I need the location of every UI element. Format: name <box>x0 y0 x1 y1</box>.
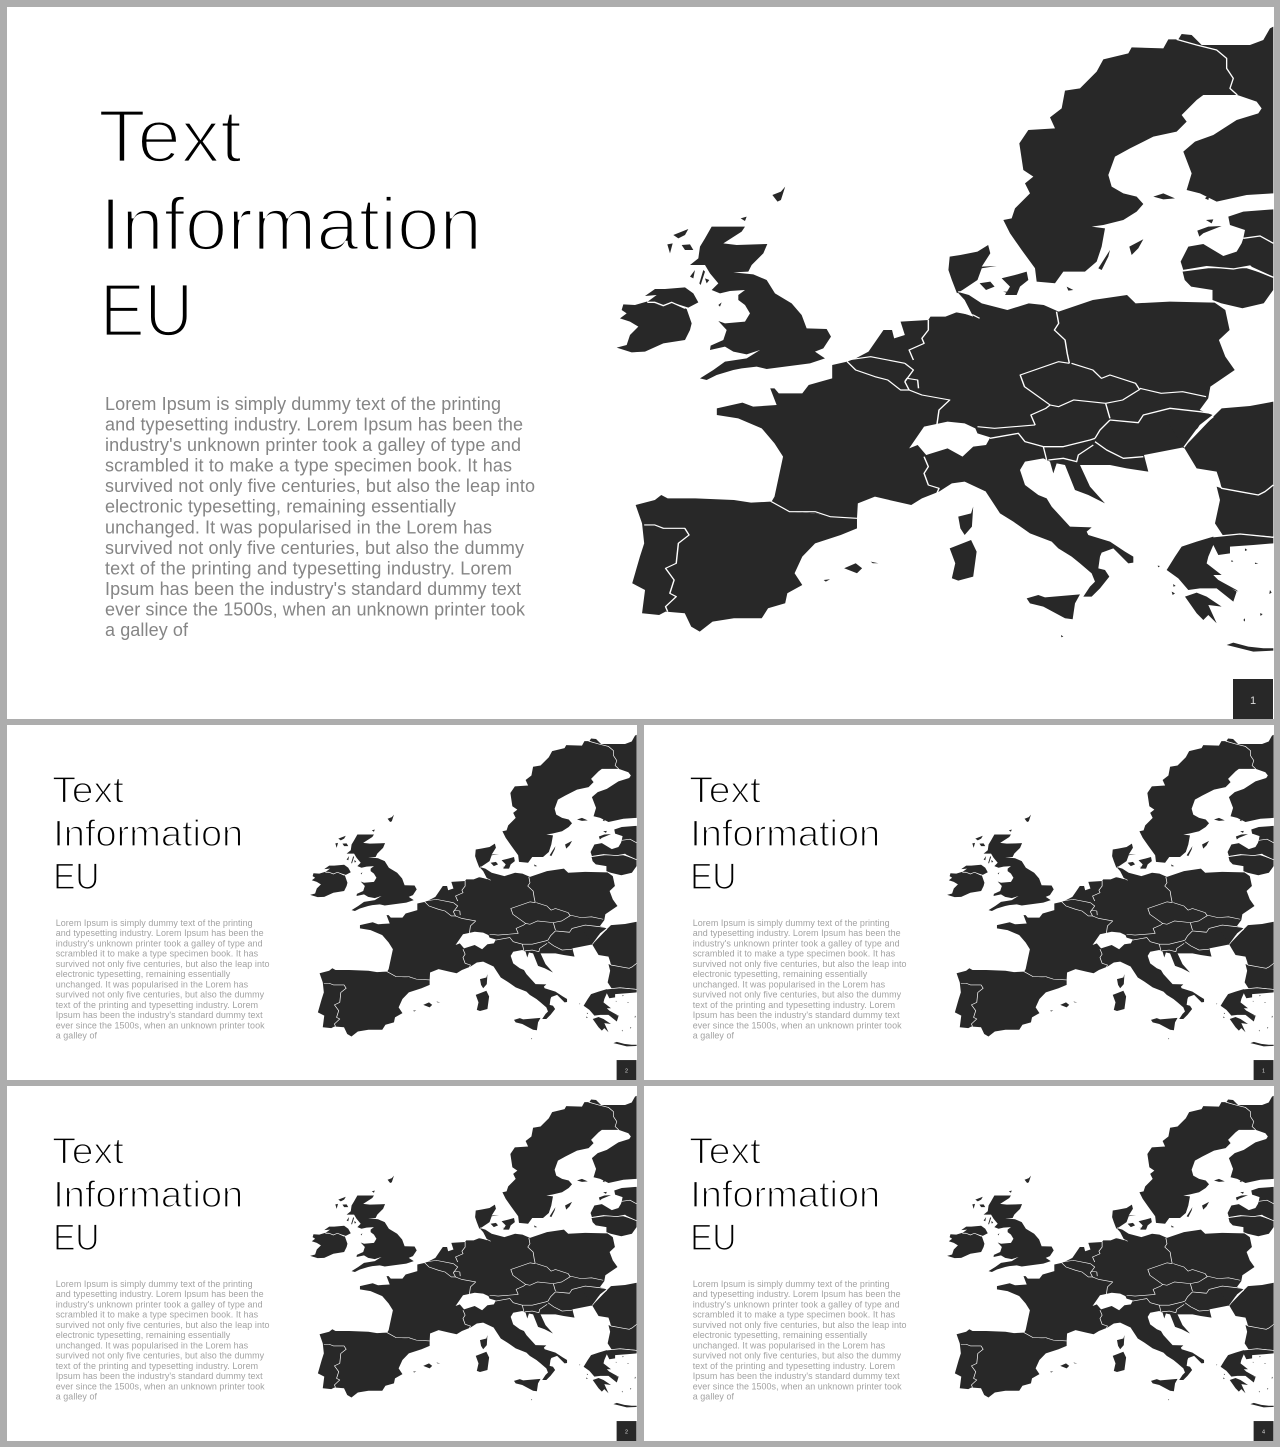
title <box>689 1129 880 1258</box>
map of Europe <box>947 1096 1274 1407</box>
page number: 1 <box>1250 695 1256 707</box>
title: EU <box>100 268 193 352</box>
panel: main slide <box>7 7 1274 719</box>
body text: electronic typesetting, remaining essentially <box>693 969 868 979</box>
body text: survived not only five centuries, but also the leap into <box>693 1320 907 1330</box>
title: Information <box>690 812 880 854</box>
body text: text of the printing and typesetting industry. Lorem <box>693 1361 895 1371</box>
map of Europe <box>617 27 1273 652</box>
body text: electronic typesetting, remaining essentially <box>105 497 456 517</box>
panel: slide 3 <box>644 725 1274 1080</box>
body text: survived not only five centuries, but also the leap into <box>56 1320 270 1330</box>
body text: unchanged. It was popularised in the Lorem has <box>56 979 249 989</box>
page number: 1 <box>1262 1069 1265 1075</box>
title: Text <box>52 768 124 810</box>
body text: and typesetting industry. Lorem Ipsum has been the <box>693 1289 901 1299</box>
body text: scrambled it to make a type specimen book. It has <box>56 949 259 959</box>
Italy, Balkans, Greece <box>980 402 1273 652</box>
page number <box>1254 1060 1274 1080</box>
body text: electronic typesetting, remaining essentially <box>56 1330 231 1340</box>
title: EU <box>690 1216 736 1258</box>
body text: survived not only five centuries, but also the dummy <box>693 990 902 1000</box>
map of Europe <box>310 1096 637 1407</box>
body text: scrambled it to make a type specimen book. It has <box>105 456 512 476</box>
body text: industry's unknown printer took a galley of type and <box>693 1299 900 1309</box>
body text: ever since the 1500s, when an unknown printer took <box>56 1020 265 1030</box>
Iberia, France, Germany, Poland <box>632 292 1235 632</box>
body text: text of the printing and typesetting industry. Lorem <box>56 1361 258 1371</box>
title: Text <box>98 94 242 178</box>
body text: unchanged. It was popularised in the Lorem has <box>56 1340 249 1350</box>
body text: a galley of <box>105 620 189 640</box>
body text: survived not only five centuries, but also the dummy <box>56 990 265 1000</box>
body text <box>56 1279 270 1402</box>
body text: Lorem Ipsum is simply dummy text of the printing <box>693 1279 890 1289</box>
title: Information <box>690 1173 880 1215</box>
body text: and typesetting industry. Lorem Ipsum has been the <box>56 928 264 938</box>
body text: Ipsum has been the industry's standard dummy text <box>693 1371 900 1381</box>
body text: text of the printing and typesetting industry. Lorem <box>693 1000 895 1010</box>
body text: survived not only five centuries, but also the leap into <box>56 959 270 969</box>
body text: text of the printing and typesetting industry. Lorem <box>105 558 512 578</box>
page number <box>617 1060 637 1080</box>
body text: Lorem Ipsum is simply dummy text of the printing <box>56 1279 253 1289</box>
title: EU <box>690 855 736 897</box>
body text: ever since the 1500s, when an unknown printer took <box>693 1381 902 1391</box>
body text: Ipsum has been the industry's standard dummy text <box>56 1371 263 1381</box>
body text <box>56 918 270 1041</box>
body text: survived not only five centuries, but also the dummy <box>56 1351 265 1361</box>
body text <box>693 918 907 1041</box>
body text: industry's unknown printer took a galley of type and <box>56 938 263 948</box>
body text: industry's unknown printer took a galley of type and <box>693 938 900 948</box>
body text: ever since the 1500s, when an unknown printer took <box>105 600 526 620</box>
page number: 2 <box>625 1430 628 1436</box>
body text: Ipsum has been the industry's standard dummy text <box>105 579 521 599</box>
title: Text <box>689 768 761 810</box>
title <box>52 1129 243 1258</box>
Scandinavia and Baltics <box>1002 27 1273 295</box>
UK and Ireland <box>617 217 831 380</box>
body text: Ipsum has been the industry's standard dummy text <box>693 1010 900 1020</box>
body text: Ipsum has been the industry's standard dummy text <box>56 1010 263 1020</box>
body text: electronic typesetting, remaining essentially <box>693 1330 868 1340</box>
body text: Lorem Ipsum is simply dummy text of the printing <box>105 394 501 414</box>
body text: electronic typesetting, remaining essentially <box>56 969 231 979</box>
title: Information <box>53 812 243 854</box>
body text: survived not only five centuries, but also the dummy <box>105 538 524 558</box>
body text: a galley of <box>693 1392 734 1402</box>
panel: slide 4 <box>7 1086 637 1441</box>
body text: industry's unknown printer took a galley of type and <box>105 435 521 455</box>
title: Text <box>52 1129 124 1171</box>
body text: ever since the 1500s, when an unknown printer took <box>56 1381 265 1391</box>
body text <box>105 394 535 640</box>
body text: Lorem Ipsum is simply dummy text of the printing <box>56 918 253 928</box>
body text: and typesetting industry. Lorem Ipsum has been the <box>105 414 523 434</box>
body text: a galley of <box>693 1031 734 1041</box>
body text: industry's unknown printer took a galley of type and <box>56 1299 263 1309</box>
title: Text <box>689 1129 761 1171</box>
page number <box>617 1421 637 1441</box>
body text: and typesetting industry. Lorem Ipsum has been the <box>56 1289 264 1299</box>
title <box>52 768 243 897</box>
body text: text of the printing and typesetting industry. Lorem <box>56 1000 258 1010</box>
body text: survived not only five centuries, but also the leap into <box>105 476 535 496</box>
page number: 4 <box>1262 1430 1265 1436</box>
body text: unchanged. It was popularised in the Lorem has <box>693 1340 886 1350</box>
country borders south-east <box>990 408 1273 537</box>
body text <box>693 1279 907 1402</box>
panel: slide 2 <box>7 725 637 1080</box>
body text: scrambled it to make a type specimen book. It has <box>693 949 896 959</box>
body text: survived not only five centuries, but also the dummy <box>693 1351 902 1361</box>
title: Information <box>53 1173 243 1215</box>
title: EU <box>53 855 99 897</box>
map of Europe <box>310 735 637 1046</box>
Ireland border <box>647 302 685 308</box>
title: Information <box>100 182 482 266</box>
page number <box>1254 1421 1274 1441</box>
body text: unchanged. It was popularised in the Lorem has <box>105 517 492 537</box>
Switzerland gap <box>909 422 990 457</box>
body text: and typesetting industry. Lorem Ipsum has been the <box>693 928 901 938</box>
country borders north <box>1177 39 1273 277</box>
Denmark, Lithuania, Shetland <box>772 187 1273 308</box>
body text: a galley of <box>56 1392 97 1402</box>
title: EU <box>53 1216 99 1258</box>
page number: 2 <box>625 1069 628 1075</box>
body text: a galley of <box>56 1031 97 1041</box>
body text: scrambled it to make a type specimen book. It has <box>56 1310 259 1320</box>
country borders west and centre <box>644 292 1206 612</box>
body text: scrambled it to make a type specimen book. It has <box>693 1310 896 1320</box>
body text: survived not only five centuries, but also the leap into <box>693 959 907 969</box>
page number <box>1233 679 1273 719</box>
title <box>689 768 880 897</box>
body text: unchanged. It was popularised in the Lorem has <box>693 979 886 989</box>
body text: ever since the 1500s, when an unknown printer took <box>693 1020 902 1030</box>
body text: Lorem Ipsum is simply dummy text of the printing <box>693 918 890 928</box>
map of Europe <box>947 735 1274 1046</box>
panel: slide 5 <box>644 1086 1274 1441</box>
title <box>98 94 482 352</box>
